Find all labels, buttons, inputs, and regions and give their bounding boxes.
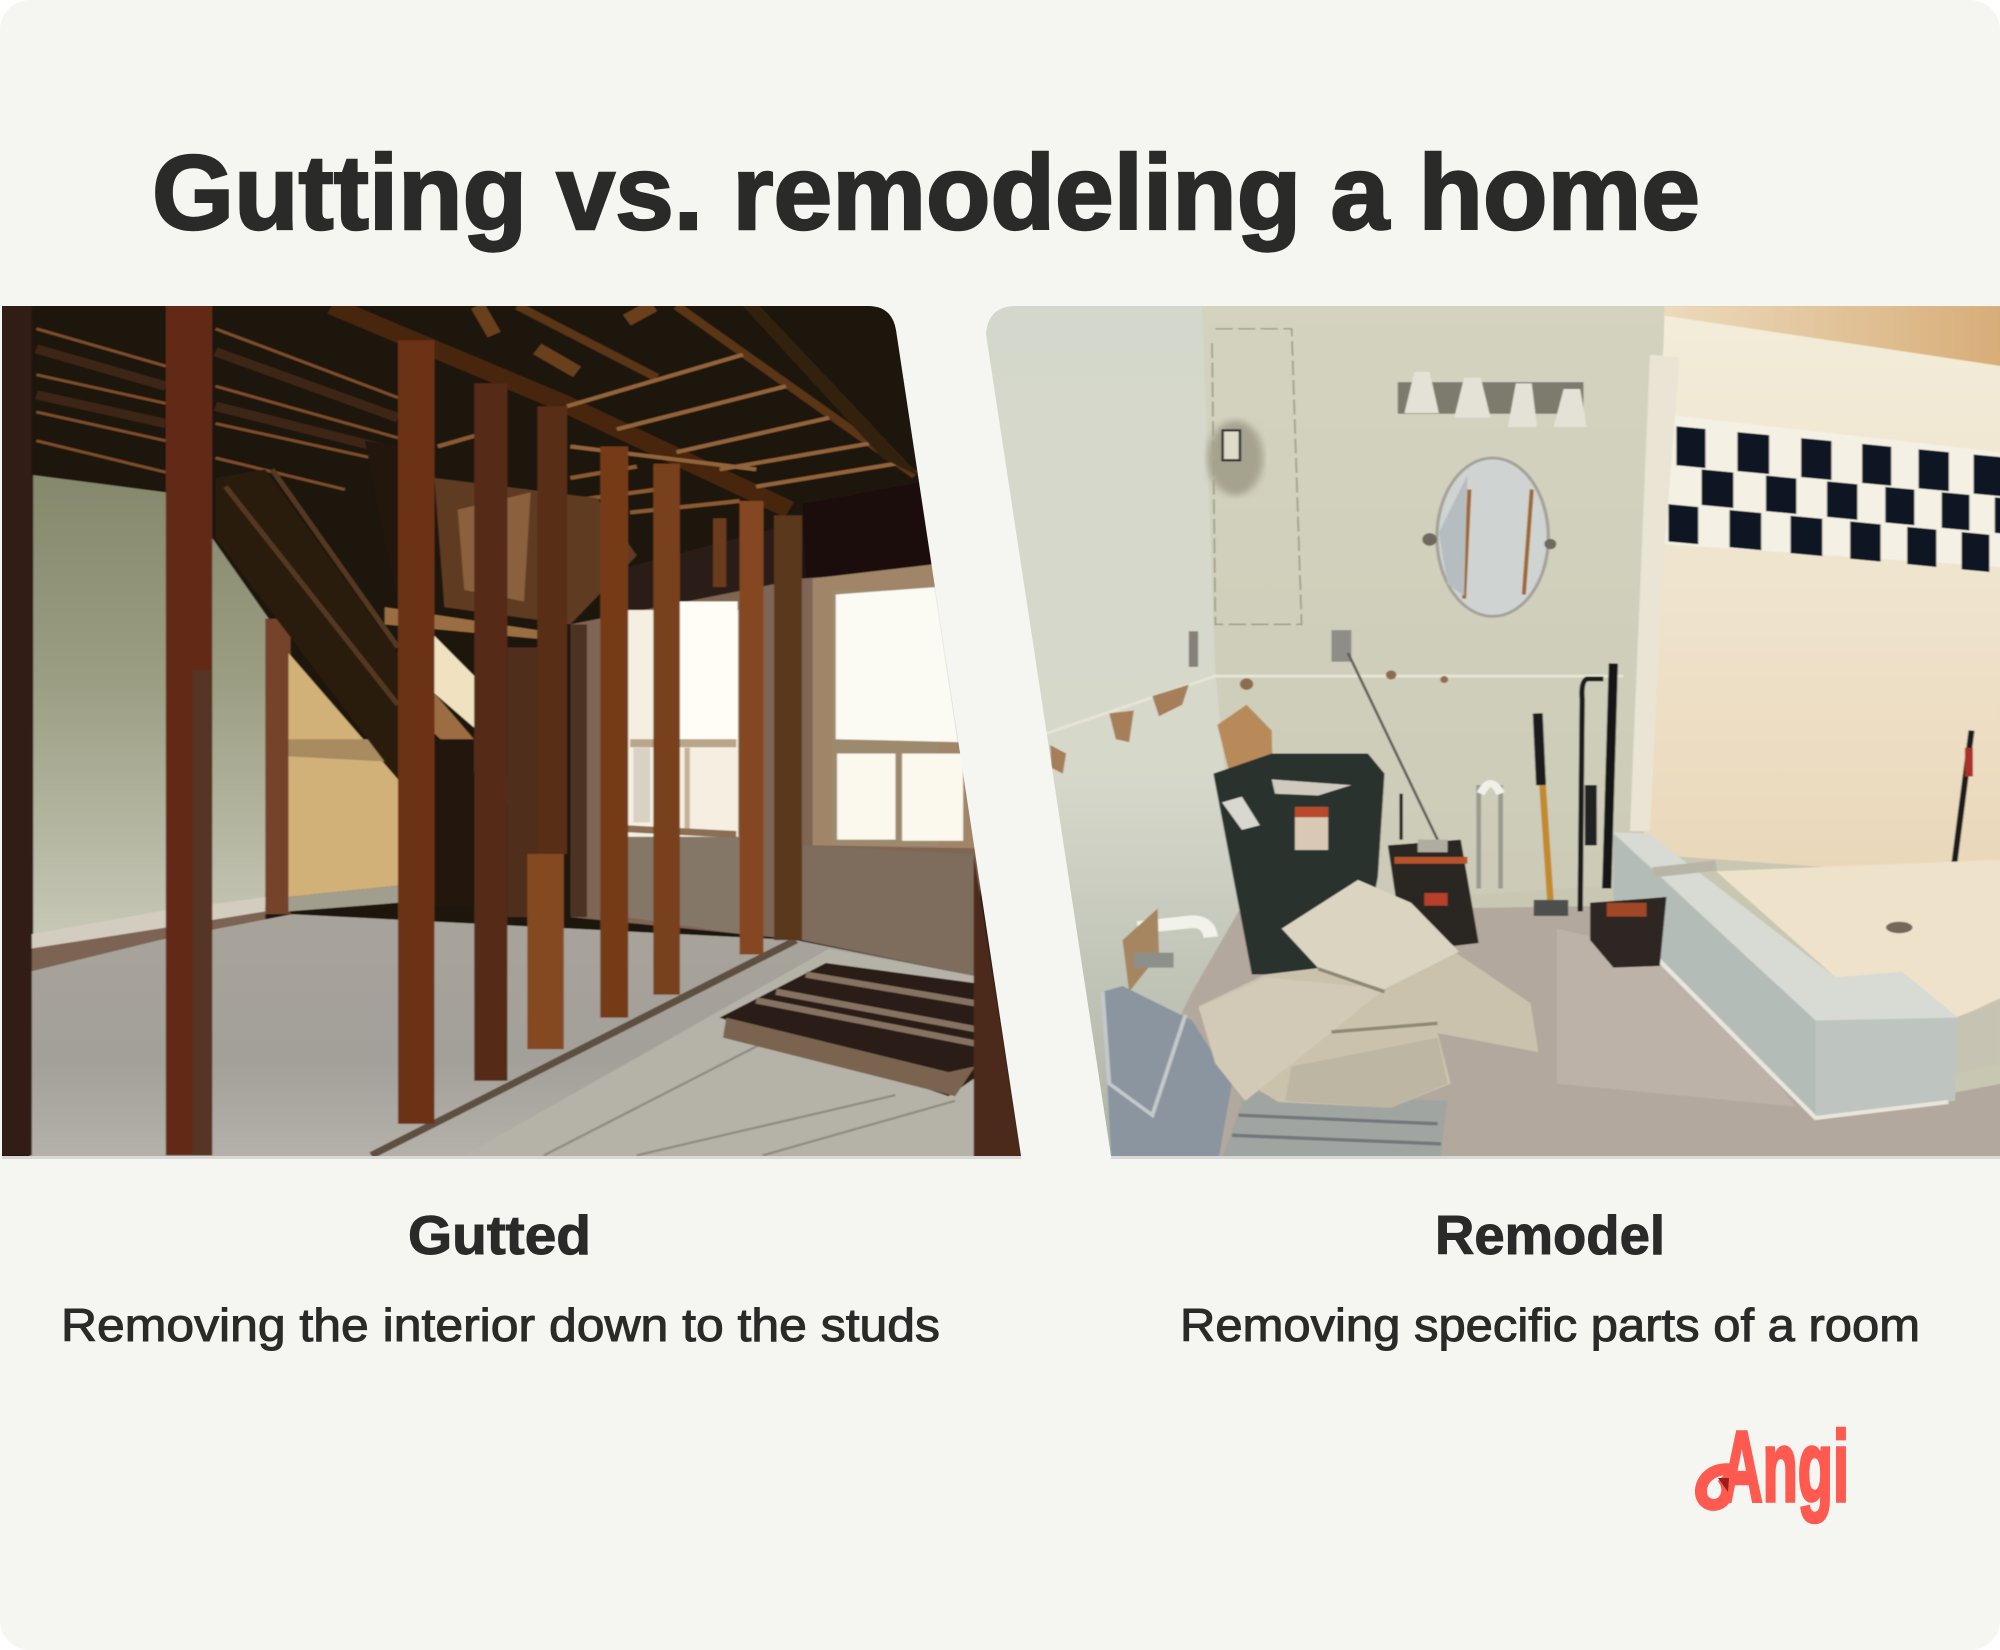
description: remodel: Removing specific parts of a room [1180,1299,1920,1351]
studs [2,306,32,1155]
floor [30,914,1021,1158]
checker tiles [1668,425,2000,573]
ceiling [1664,306,2000,366]
battery pack and drills [1590,897,1666,968]
grey bag [1103,986,1232,1158]
ceiling joists [36,306,915,512]
title: Gutting vs. remodeling a home [152,134,1700,252]
plumbing stub [1479,785,1501,888]
base of left wall [30,897,265,952]
floor [1111,906,2000,1158]
curb [1613,832,1958,1022]
shower valve [1653,865,1716,872]
right corner post [974,854,1021,1158]
far rafters and back area [434,478,637,624]
side wall [983,306,1239,1158]
shower floor [1716,860,2000,1018]
drop cloth [1199,952,1538,1108]
broom at right [1953,731,1972,874]
far curb [1957,1013,1968,1018]
wall patches [1109,710,1134,742]
tools [1538,713,1550,900]
description: gutted: Removing the interior down to the studs [61,1299,940,1351]
tarps [1222,1092,1448,1158]
heading: remodel: Remodel [1435,1204,1665,1266]
radio [1388,840,1479,946]
trash can [1213,754,1385,975]
back wall, concrete [570,576,982,940]
mark lines [1212,329,1302,624]
yellow wall [289,653,398,897]
outlets [1223,430,1240,460]
center wall [1202,306,1664,678]
photo: bathroom mid-remodel [960,303,2000,1158]
pipe [1138,922,1211,937]
wood in bin [1216,704,1273,769]
logo: Angi: Angi [1721,1411,1849,1523]
light fixture [1398,382,1584,414]
window mid [627,610,738,837]
logo: Angi [1701,1411,1849,1523]
window right [813,564,975,848]
photo shadows [2,1156,2000,1159]
mirror [1437,458,1548,616]
stain [1207,421,1263,495]
photo: gutted attic interior [0,303,1035,1158]
heading: gutted: Gutted [408,1204,591,1266]
floor opening [720,963,975,1096]
diagonal staircase rafters [216,469,398,779]
tile wall [1643,316,2000,880]
left wall [33,475,269,946]
